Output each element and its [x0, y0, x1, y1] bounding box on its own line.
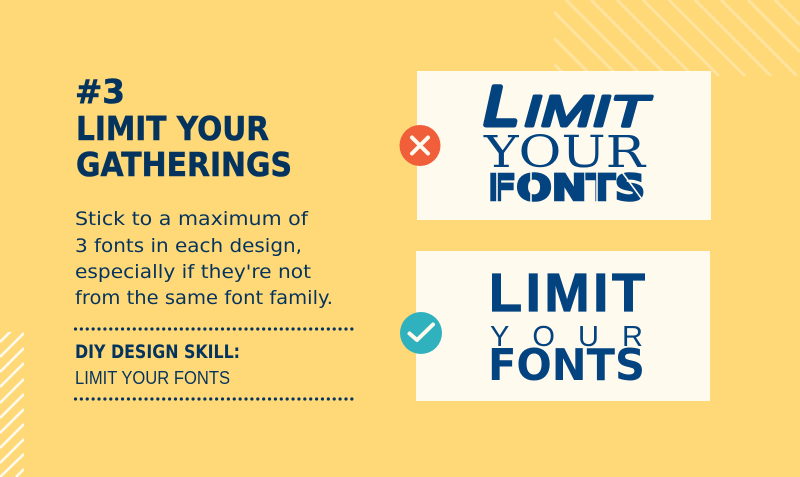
heading: GATHERINGS: [76, 145, 292, 184]
dotted divider top: [76, 327, 352, 331]
skill label: [75, 341, 240, 388]
logo text: limit brush: [484, 74, 652, 137]
heading: [75, 72, 292, 184]
body text: Stick to a maximum of: [75, 208, 309, 230]
icon: right check: [400, 312, 442, 354]
panel: wrong example: [417, 71, 711, 220]
body text: from the same font family.: [75, 287, 333, 309]
logo text: limit brush: L: [484, 74, 519, 137]
logo text: your serif: YOUR: [483, 127, 647, 178]
logo text: fonts stencil: FONTS: [488, 168, 645, 209]
body text: [75, 208, 333, 309]
body text: 3 fonts in each design,: [75, 235, 302, 257]
logo text: limit bold: LIMIT: [489, 263, 645, 323]
logo text: fonts bold: FONTS: [488, 340, 645, 391]
logo text: limit brush: IMIT: [524, 87, 652, 136]
dotted divider bottom: [76, 397, 352, 401]
icon: wrong cross: [400, 125, 440, 166]
heading: #3: [75, 72, 125, 111]
skill label: LIMIT YOUR FONTS: [75, 368, 230, 388]
body text: especially if they're not: [75, 261, 311, 283]
panel: right example: [416, 251, 710, 401]
heading: LIMIT YOUR: [76, 109, 269, 148]
skill label: DIY DESIGN SKILL:: [75, 341, 240, 363]
logo text: your spaced: YOUR: [490, 321, 643, 353]
